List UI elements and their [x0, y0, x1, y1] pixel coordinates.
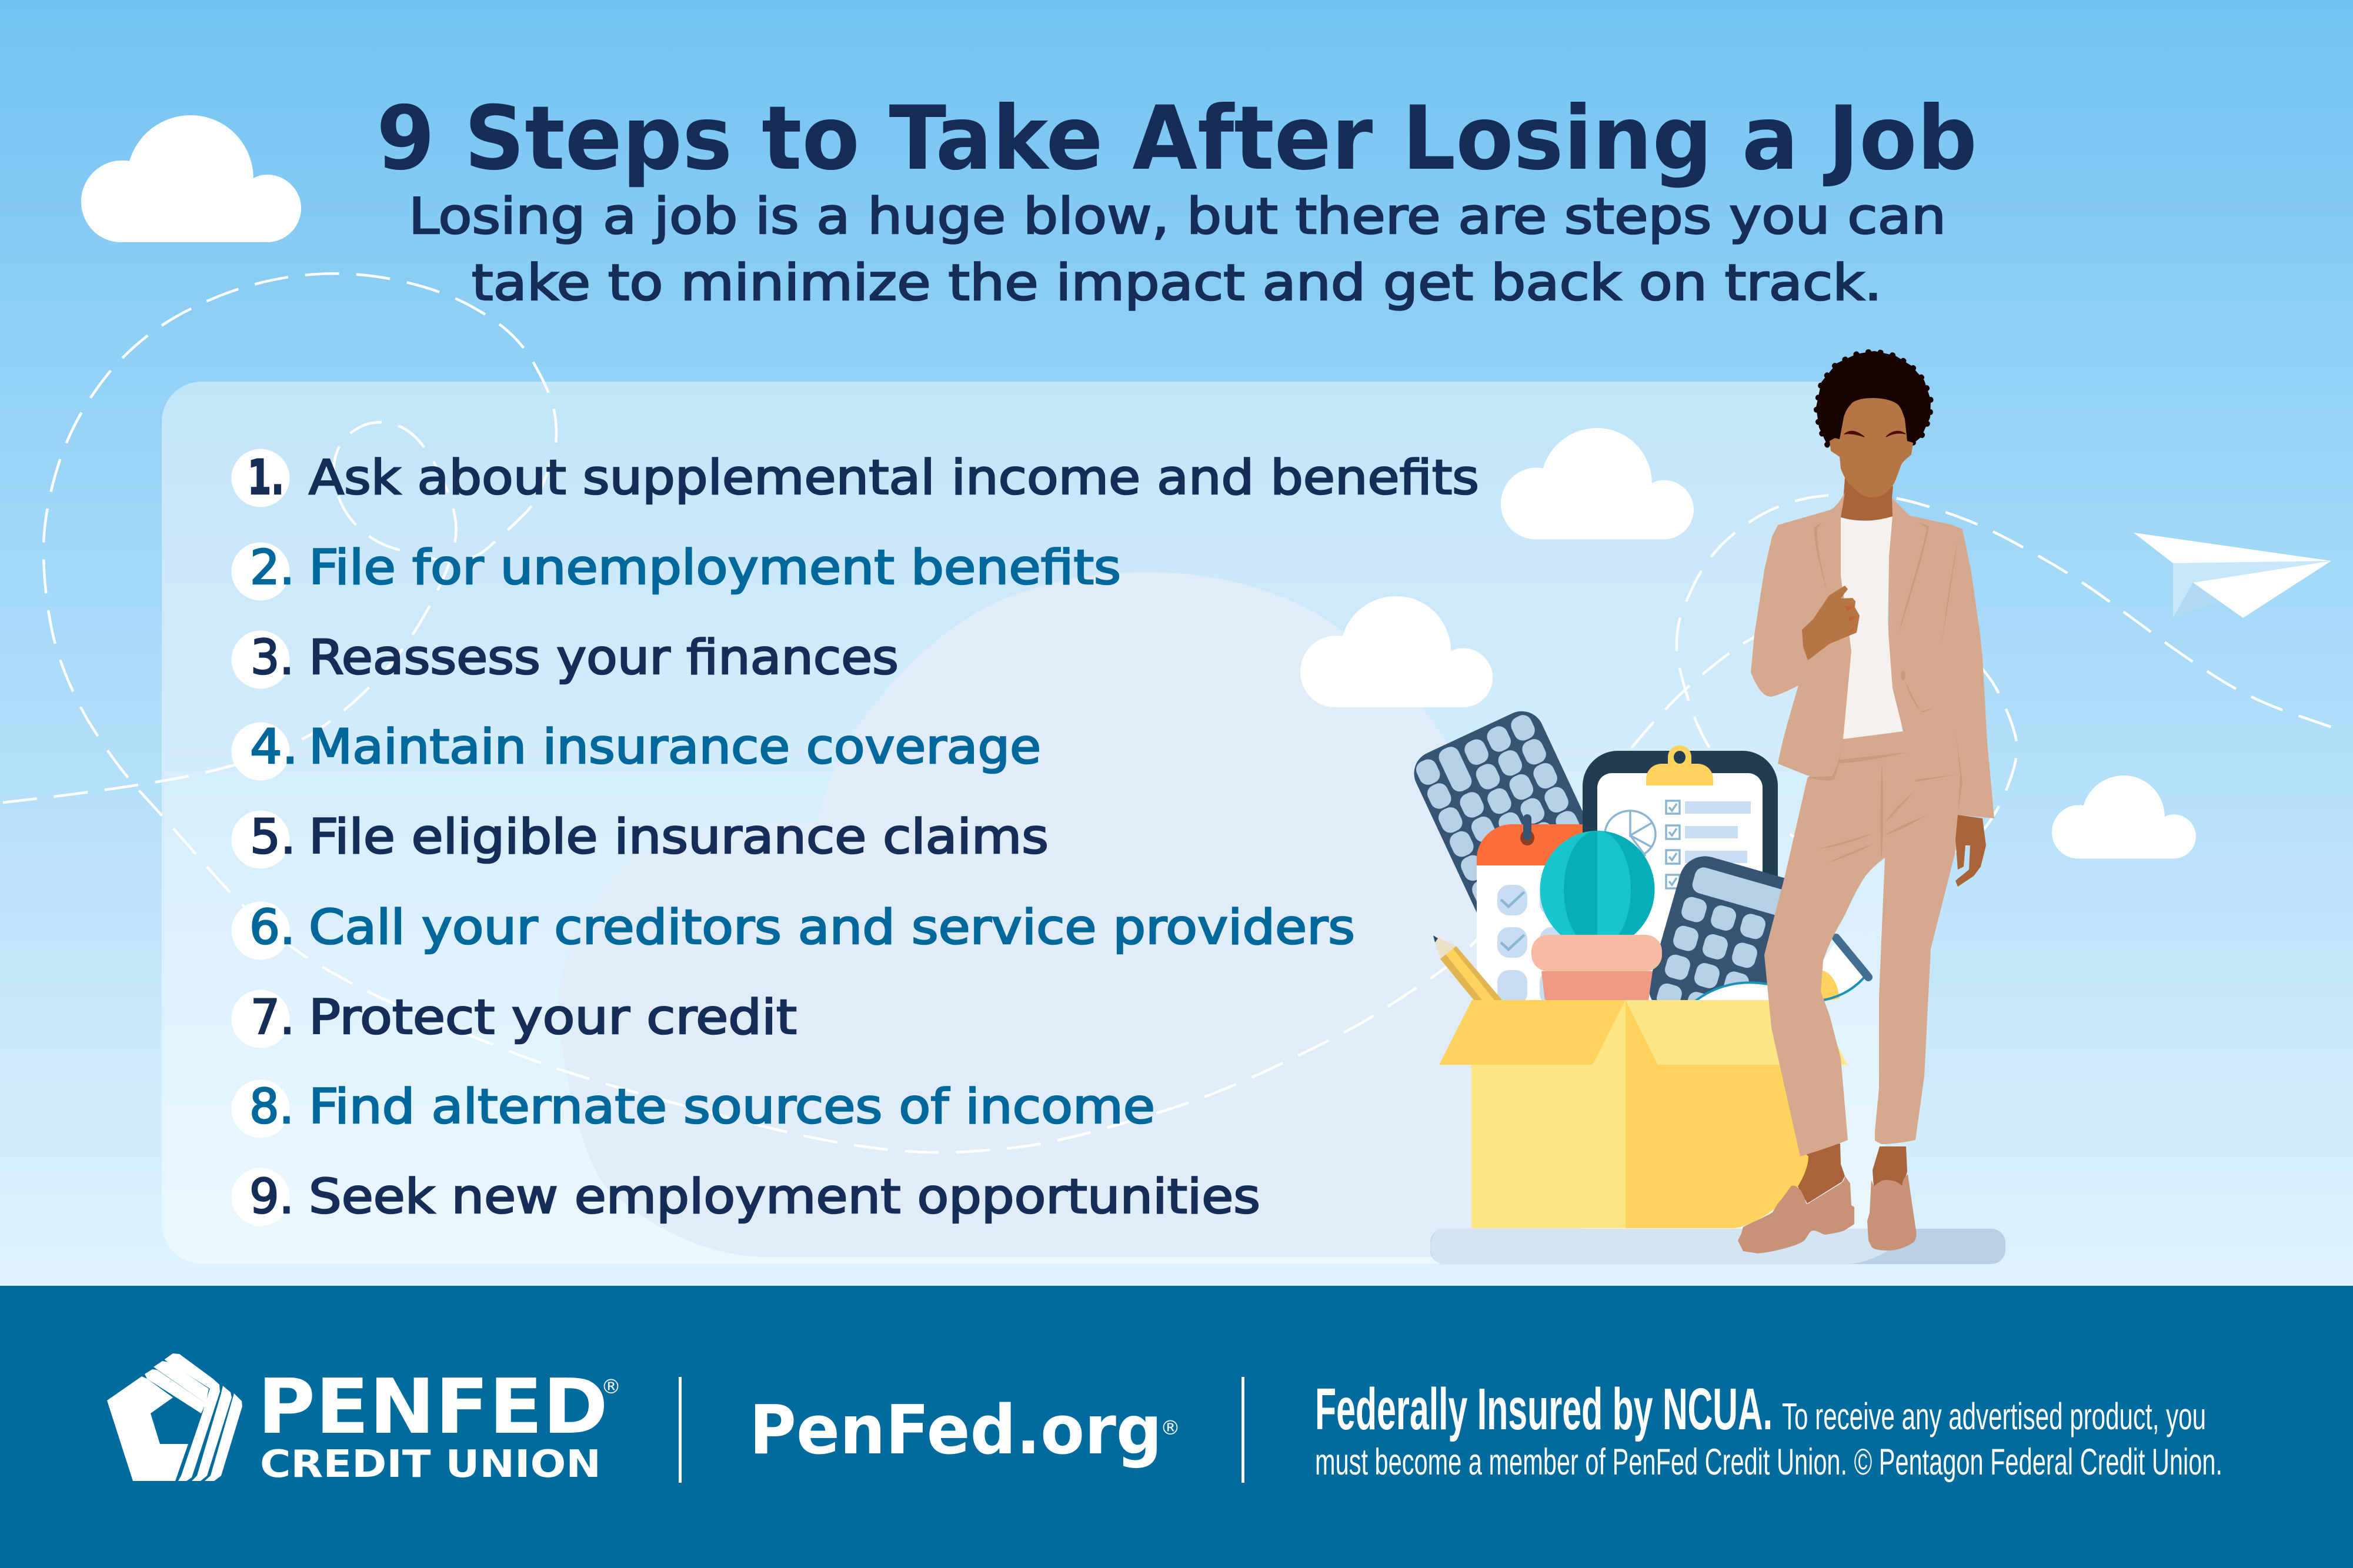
subtitle: [409, 188, 1946, 312]
divider left: [679, 1377, 682, 1483]
step 3: Reassess your finances: [309, 630, 899, 686]
cloud: above box: [1300, 596, 1493, 707]
step 8: 8.: [249, 1079, 294, 1135]
eyebrows: [1845, 432, 1905, 437]
logo wordmark: PENFED: [258, 1363, 608, 1451]
cloud: top left: [81, 115, 301, 242]
step 6: Call your creditors and service providers: [309, 900, 1355, 955]
subtitle: take to minimize the impact and get back on track.: [472, 254, 1882, 312]
step 6: 6.: [249, 900, 295, 955]
step 1: Ask about supplemental income and benefits: [309, 450, 1479, 506]
steps list: [232, 449, 1479, 1226]
trousers: [1764, 731, 1960, 1156]
step 1: 1.: [248, 450, 284, 506]
legal disclaimer: Federally Insured by NCUA.: [1315, 1376, 1773, 1442]
step 7: Protect your credit: [309, 990, 797, 1045]
footer band: [0, 1286, 2353, 1568]
step 5: File eligible insurance claims: [309, 810, 1049, 865]
subtitle: Losing a job is a huge blow, but there are steps you can: [409, 188, 1946, 246]
jacket folds: [1814, 522, 1958, 642]
icon: pill sheet: [1407, 704, 1650, 1013]
ground shadow: [1430, 1229, 2005, 1264]
hair: [1816, 351, 1931, 447]
dashed flight path: [3, 273, 2337, 1152]
step 7: 7.: [251, 990, 295, 1045]
step 9: 9.: [249, 1169, 294, 1225]
icon: potted cactus: [1531, 831, 1662, 1001]
step 4: Maintain insurance coverage: [309, 720, 1041, 775]
face: [1830, 398, 1913, 497]
icon: calendar: [1477, 818, 1647, 1011]
icon: calculator: [1643, 850, 1823, 1044]
logo: PenFed pentagon mark: [107, 1353, 242, 1481]
panel: steps list background: [162, 382, 1885, 1263]
legal disclaimer: [1315, 1376, 2222, 1483]
cloud: right: [2052, 775, 2196, 858]
website: ®: [1160, 1416, 1180, 1440]
shirt: [1840, 516, 1903, 739]
logo wordmark: [258, 1363, 621, 1486]
icon: clipboard: [1583, 745, 1778, 1011]
logo wordmark: ®: [601, 1375, 621, 1399]
cloud: beside list top: [1501, 428, 1694, 539]
step 3: 3.: [251, 630, 294, 686]
figure: standing woman: [1738, 351, 1994, 1253]
divider right: [1241, 1377, 1244, 1483]
title: 9 Steps to Take After Losing a Job: [376, 88, 1977, 190]
step 8: Find alternate sources of income: [309, 1079, 1155, 1135]
right hand: [1955, 815, 1986, 887]
neck: [1841, 478, 1893, 521]
trouser folds: [1813, 753, 1926, 864]
icon: cardboard box: [1439, 1000, 1847, 1228]
website: PenFed.org: [749, 1391, 1162, 1470]
step 5: 5.: [250, 810, 296, 865]
right shoe and ankle: [1867, 1146, 1917, 1251]
icon: pencil: [1433, 935, 1502, 1000]
jacket: [1751, 493, 1851, 780]
left shoe and ankle: [1738, 1144, 1854, 1253]
icon: glasses and pen: [1694, 938, 1868, 1005]
logo wordmark: CREDIT UNION: [260, 1443, 601, 1486]
icon: paper airplane: [2134, 533, 2331, 618]
step 2: File for unemployment benefits: [309, 540, 1121, 596]
step 9: Seek new employment opportunities: [309, 1169, 1260, 1225]
step 2: 2.: [250, 540, 295, 596]
large background cloud shape: [558, 572, 1588, 1257]
step 4: 4.: [250, 720, 298, 775]
left hand: [1802, 586, 1860, 660]
